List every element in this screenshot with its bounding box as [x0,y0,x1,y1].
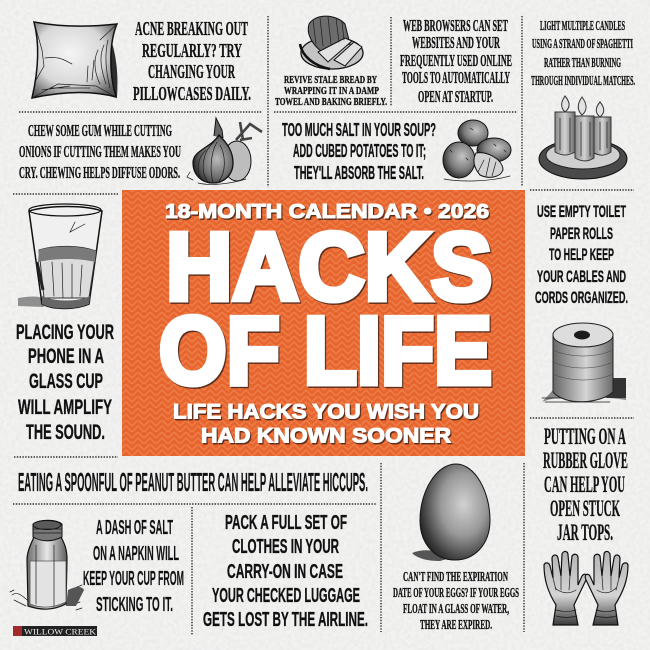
text: carry-on tip: CLOTHES IN YOUR [232,536,339,558]
title: hacks: HACKS [166,214,492,320]
text: web browsers tip [400,16,512,106]
text: phone glass tip: PHONE IN A [28,345,104,368]
text: bread tip: WRAPPING IT IN A DAMP [284,86,379,97]
text: egg tip [393,569,519,632]
text: soup tip: THEY'LL ABSORB THE SALT. [294,162,424,183]
text: acne tip: PILLOWCASES DAILY. [133,83,251,105]
text: carry-on tip: CARRY-ON IN CASE [227,561,343,583]
text: ON A NAPKIN WILL [93,542,179,565]
text: rubber glove tip [543,424,628,546]
text: web browsers tip: WEB BROWSERS CAN SET [403,16,508,35]
text: acne tip: ACNE BREAKING OUT [135,18,248,40]
text: toilet rolls tip [535,202,628,307]
text: acne tip [133,18,251,105]
title: of life: OF LIFE [159,298,492,404]
text: ONIONS IF CUTTING THEM MAKES YOU [19,142,181,161]
logo: willow creek: WILLOW CREEK [24,626,97,636]
panel: orange title panel [122,190,525,456]
text: egg tip: CAN'T FIND THE EXPIRATION [403,569,508,584]
subtitle line 2: HAD KNOWN SOONER [201,424,451,448]
icon: onions [187,118,262,184]
text: carry-on tip: PACK A FULL SET OF [225,512,347,534]
icon: three candles on plate [539,96,627,179]
text: soup tip: TOO MUCH SALT IN YOUR SOUP? [282,119,436,140]
text: soup tip [282,119,436,183]
text: FREQUENTLY USED ONLINE [400,51,512,70]
icon: salt shaker [10,520,84,610]
text: phone glass tip: PLACING YOUR [16,321,114,344]
text: onion tip [19,121,181,182]
text: web browsers tip: WEBSITES AND YOUR [412,33,501,52]
text: carry-on tip [203,512,368,631]
text: TOOLS TO AUTOMATICALLY [402,68,510,87]
text: soup tip: ADD CUBED POTATOES TO IT; [293,140,426,161]
icon: egg [412,464,490,561]
text: phone glass tip: WILL AMPLIFY [18,396,112,419]
heading: 18-month calendar 2026: 18-MONTH CALENDAR • 2026 [165,200,489,223]
text: CRY. CHEWING HELPS DIFFUSE ODORS. [19,163,180,182]
icon: toilet paper roll [542,323,626,402]
icon: pillow [32,22,117,98]
text: salt napkin tip: STICKING TO IT. [96,593,173,616]
text: acne tip: CHANGING YOUR [148,61,235,83]
text: carry-on tip: YOUR CHECKED LUGGAGE [212,585,360,607]
text: bread tip: REVIVE STALE BREAD BY [284,75,377,86]
icon: bread loaf on board [300,16,363,69]
text: phone glass tip: THE SOUND. [26,421,105,444]
icon: potatoes [443,120,511,181]
text: egg tip: THEY ARE EXPIRED. [420,617,492,632]
text: acne tip: REGULARLY? TRY [142,40,242,62]
text: bread tip [275,75,387,108]
icon: glass of water [18,204,102,308]
icon: rubber gloves [544,551,628,625]
text: KEEP YOUR CUP FROM [83,567,184,590]
text: candles tip [531,19,635,89]
text: egg tip: DATE OF YOUR EGGS? IF YOUR EGGS [393,585,519,600]
text: onion tip: CHEW SOME GUM WHILE CUTTING [28,121,172,140]
text: web browsers tip: OPEN AT STARTUP. [418,87,493,106]
text: egg tip: FLOAT IN A GLASS OF WATER, [403,601,509,616]
text: phone glass tip [16,321,114,444]
text: salt napkin tip [83,516,184,616]
text: bread tip: TOWEL AND BAKING BRIEFLY. [275,97,387,108]
text: salt napkin tip: A DASH OF SALT [96,516,173,539]
text: phone glass tip: GLASS CUP [29,370,103,393]
subtitle line 1: LIFE HACKS YOU WISH YOU [173,400,479,424]
text: carry-on tip: GETS LOST BY THE AIRLINE. [203,609,368,631]
